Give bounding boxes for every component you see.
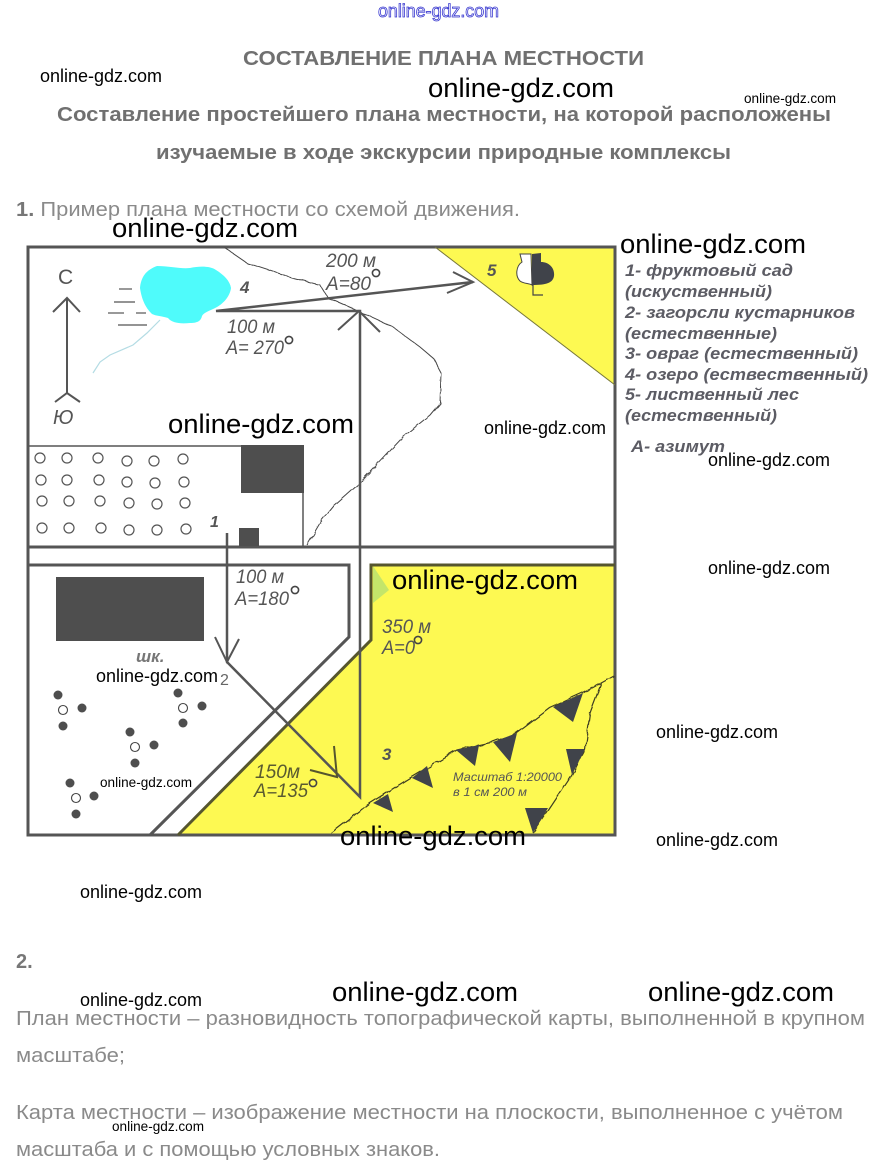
map labels: 2 xyxy=(220,672,229,689)
compass arrow xyxy=(53,266,80,429)
icon: lake xyxy=(140,266,231,323)
watermarks: online-gdz.com xyxy=(80,882,202,902)
watermarks: online-gdz.com xyxy=(656,722,778,742)
map labels: 100 м xyxy=(227,317,275,338)
map labels: 3 xyxy=(382,745,392,764)
legend: 4- озеро (ествественный) xyxy=(624,365,868,384)
watermarks: online-gdz.com xyxy=(100,775,192,790)
shrub clusters xyxy=(54,688,206,818)
map labels: 200 м xyxy=(325,251,376,272)
green tint patch xyxy=(373,566,389,603)
definition: terrain plan: План местности – разновидность топографической карты, выполненной в крупном xyxy=(16,1008,865,1030)
yellow area: deciduous forest xyxy=(435,247,615,385)
school building xyxy=(56,577,204,641)
watermarks: online-gdz.com xyxy=(648,977,834,1007)
legend: 3- овраг (естественный) xyxy=(625,344,858,363)
watermarks: online-gdz.com xyxy=(708,450,830,470)
definition: terrain plan xyxy=(16,1008,865,1067)
map labels: А=0 xyxy=(381,638,415,659)
watermarks: online-gdz.com xyxy=(708,558,830,578)
title: СОСТАВЛЕНИЕ ПЛАНА МЕСТНОСТИ xyxy=(243,48,644,70)
legend: (естественный) xyxy=(625,406,777,425)
legend: 2- загорсли кустарников xyxy=(624,303,855,322)
watermarks: online-gdz.com xyxy=(80,990,202,1010)
map labels: А=80 xyxy=(325,274,371,295)
watermarks: online-gdz.com xyxy=(96,666,218,686)
watermarks: online-gdz.com xyxy=(428,73,614,103)
compass arrow: С xyxy=(58,266,73,289)
definition: terrain plan: масштабе; xyxy=(16,1045,125,1067)
map labels: шк. xyxy=(136,647,164,666)
roads xyxy=(28,247,615,835)
section 1 heading: 1. Пример плана местности со схемой движения. xyxy=(16,199,520,221)
map labels: 100 м xyxy=(236,567,284,588)
map labels: в 1 см 200 м xyxy=(453,785,527,799)
map labels: 350 м xyxy=(382,617,431,638)
legend: (естественные) xyxy=(625,324,777,343)
map labels: 1 xyxy=(210,514,219,531)
yellow area: ravine xyxy=(178,565,615,835)
watermarks: online-gdz.com xyxy=(620,229,806,259)
watermarks: online-gdz.com xyxy=(340,821,526,851)
watermarks: online-gdz.com xyxy=(40,66,162,86)
map labels: 4 xyxy=(239,278,250,297)
watermarks: online-gdz.com xyxy=(378,1,499,21)
subtitle: изучаемые в ходе экскурсии природные комплексы xyxy=(156,142,731,164)
definition: terrain map xyxy=(16,1102,843,1161)
subtitle: Составление простейшего плана местности, на которой расположены xyxy=(57,104,831,126)
legend: 5- лиственный лес xyxy=(625,385,800,404)
legend: (искуственный) xyxy=(625,282,772,301)
section 2 number: 2. xyxy=(16,951,33,973)
legend: 1- фруктовый сад xyxy=(625,261,793,280)
map labels: А=135 xyxy=(253,781,308,802)
definition: terrain map: масштаба и с помощью условных знаков. xyxy=(16,1139,440,1161)
icon: deciduous tree xyxy=(517,253,554,295)
map labels: 5 xyxy=(487,261,497,280)
map labels: А= 270 xyxy=(225,338,284,359)
winding stream line xyxy=(225,248,441,545)
watermarks: online-gdz.com xyxy=(112,213,298,243)
map frame xyxy=(28,247,615,835)
orchard plot xyxy=(28,445,304,546)
map labels: А=180 xyxy=(234,589,289,610)
map labels: 150м xyxy=(255,762,300,783)
watermarks: online-gdz.com xyxy=(168,409,354,439)
watermarks: online-gdz.com xyxy=(112,1119,204,1134)
map labels: Масштаб 1:20000 xyxy=(453,770,562,784)
subtitle xyxy=(57,104,831,164)
river xyxy=(93,320,160,373)
watermarks: online-gdz.com xyxy=(484,418,606,438)
watermarks: online-gdz.com xyxy=(392,565,578,595)
ravine line xyxy=(331,676,614,833)
legend: А- азимут xyxy=(630,437,725,456)
marsh lines xyxy=(108,289,147,325)
watermarks: online-gdz.com xyxy=(744,91,836,106)
watermarks: online-gdz.com xyxy=(332,977,518,1007)
watermarks: online-gdz.com xyxy=(656,830,778,850)
definition: terrain map: Карта местности – изображение местности на плоскости, выполненное с учётом xyxy=(16,1102,843,1124)
compass arrow: Ю xyxy=(53,407,73,429)
legend xyxy=(624,261,868,456)
map plan xyxy=(28,247,615,835)
map labels xyxy=(136,251,562,802)
route arrows xyxy=(215,272,473,797)
